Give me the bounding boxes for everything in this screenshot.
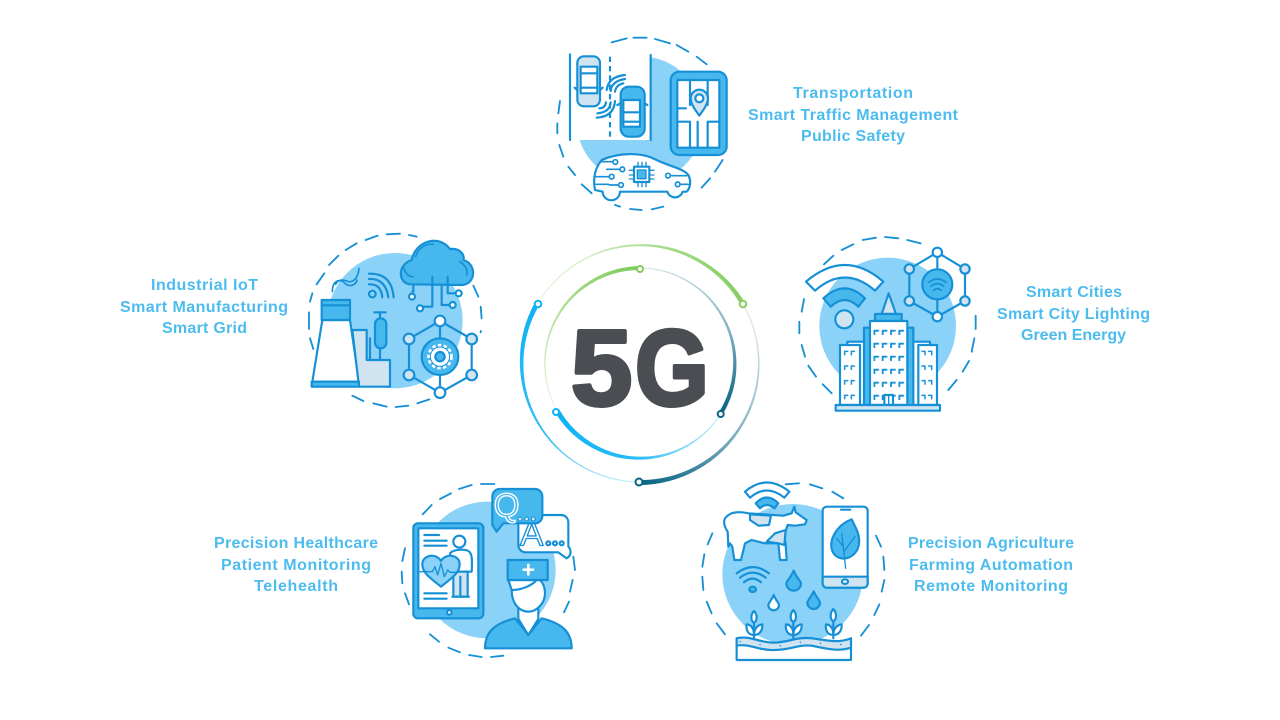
label: healthcare: Precision Healthcare [214,535,378,552]
icon: smart cities [799,237,976,411]
inner green arc [545,266,640,411]
label: healthcare: Patient Monitoring [221,557,371,574]
outer green arc [538,245,745,305]
network hexagon [905,248,970,321]
light circle [819,258,956,394]
light circle [576,56,704,184]
label: healthcare: Telehealth [254,578,338,595]
central 5G ring [520,245,759,486]
tablet [413,523,483,618]
factory [312,268,390,387]
label: agriculture [908,535,1074,595]
label: transportation [748,85,959,145]
dashed ring [402,484,575,657]
icon: agriculture [702,482,884,660]
ground [737,638,851,660]
label: industrial iot [120,277,288,337]
label: smart cities: Green Energy [1021,327,1126,344]
cow [724,507,807,560]
outer blue arc [520,303,639,482]
wifi symbol [806,265,883,328]
icon: industrial iot [309,234,482,407]
light circle [722,504,863,645]
wifi signal [369,274,394,297]
dashed ring [702,483,884,636]
dashed ring [799,237,976,393]
water drops [768,571,820,610]
field wifi [737,567,769,592]
question bubble: Q [494,488,520,525]
label: smart cities: Smart City Lighting [997,306,1150,323]
5G title: 5 [571,308,632,429]
label: smart cities: Smart Cities [1026,284,1122,301]
ring nodes [535,266,746,486]
label: agriculture: Remote Monitoring [914,578,1068,595]
plants [746,609,842,638]
label: industrial iot: Smart Grid [162,320,247,337]
icon: transportation [557,38,727,210]
answer bubble: A [520,515,544,554]
inner blue arc [556,410,721,459]
top wifi [745,482,789,508]
phone [823,507,868,588]
5G title: G [635,307,709,428]
road and cars [570,54,651,140]
road background [568,52,651,140]
label: industrial iot: Industrial IoT [151,277,258,294]
map tablet [671,72,727,155]
skyscraper [836,293,940,411]
dashed ring [557,38,723,210]
inner teal arc [640,268,736,414]
label: transportation: Transportation [793,85,913,102]
label: smart cities [997,284,1150,344]
answer bubble [518,515,571,558]
label: industrial iot: Smart Manufacturing [120,299,288,316]
light circle [419,502,556,638]
5G title [571,307,709,429]
label: transportation: Public Safety [801,128,905,145]
label: agriculture: Farming Automation [909,557,1073,574]
nurse [485,560,572,648]
icon: healthcare [402,484,575,657]
gear hexagon [404,316,477,398]
cloud [401,241,473,311]
label: transportation: Smart Traffic Management [748,107,959,124]
label: agriculture: Precision Agriculture [908,535,1074,552]
outer teal arc [640,304,759,484]
connected car [594,154,690,200]
question bubble [492,488,542,532]
label: healthcare [214,535,378,595]
light circle [327,253,463,388]
dashed ring [309,234,482,407]
